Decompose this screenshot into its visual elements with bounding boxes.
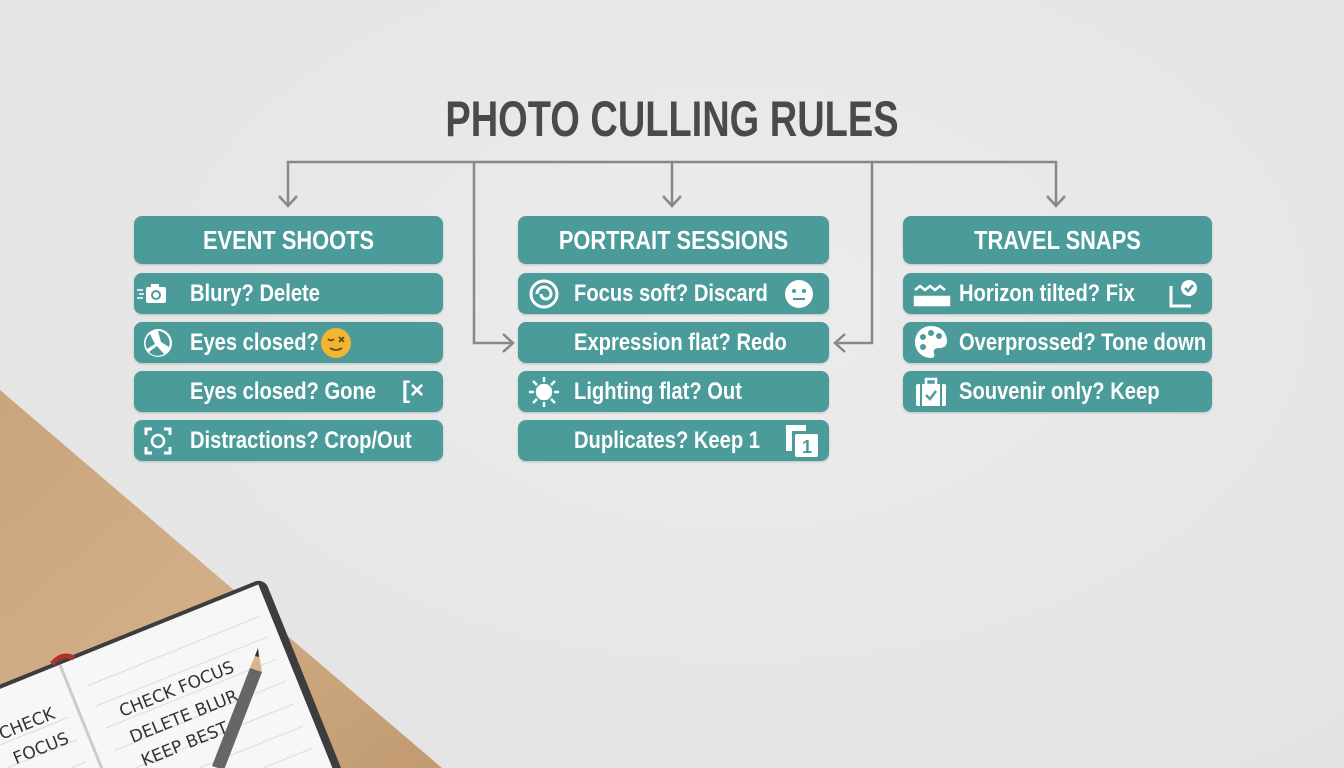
row: souvenir: Souvenir only? Keep: [959, 378, 1160, 405]
row: focus soft: [518, 273, 829, 314]
title: PHOTO CULLING RULES: [445, 91, 899, 147]
row: horizon: [903, 273, 1212, 314]
heading: portrait sessions: [518, 216, 829, 264]
handwritten notes: [0, 635, 257, 768]
panel: event shoots: [133, 216, 444, 463]
row: overprocessed: Overprossed? Tone down: [959, 329, 1206, 356]
pencil: [212, 648, 262, 768]
heading: event shoots: [134, 216, 443, 264]
row: blury: Blury? Delete: [190, 280, 320, 307]
row: duplicates: 1: [802, 437, 812, 457]
row: overprocessed: [903, 322, 1212, 363]
row: duplicates: [518, 420, 829, 461]
row: distractions: Distractions? Crop/Out: [190, 427, 412, 454]
row: focus soft: Focus soft? Discard: [574, 280, 768, 307]
handwritten notes: CHECK FOCUS: [116, 658, 237, 722]
row: eyes closed gone: Eyes closed? Gone: [190, 378, 376, 405]
row: duplicates: Duplicates? Keep 1: [574, 427, 760, 454]
row: expression flat: [518, 322, 829, 363]
handwritten notes: DELETE BLUR: [127, 686, 241, 748]
heading: travel snaps: [903, 216, 1212, 264]
row: eyes closed emoji: [134, 322, 443, 363]
row: eyes closed gone: [×: [402, 377, 424, 404]
row: eyes closed emoji: Eyes closed?: [190, 329, 319, 356]
row: souvenir: [903, 371, 1212, 412]
heading: travel snaps: TRAVEL SNAPS: [974, 225, 1141, 255]
handwritten notes: FOCUS: [10, 729, 72, 768]
row: distractions: [134, 420, 443, 461]
panel: portrait sessions: [517, 216, 830, 463]
panel: travel snaps: [902, 216, 1213, 414]
row: horizon: Horizon tilted? Fix: [959, 280, 1135, 307]
row: eyes closed gone: [134, 371, 443, 412]
row: expression flat: Expression flat? Redo: [574, 329, 787, 356]
heading: event shoots: EVENT SHOOTS: [203, 225, 374, 255]
row: blury: [134, 273, 443, 314]
heading: portrait sessions: PORTRAIT SESSIONS: [559, 225, 788, 255]
row: lighting flat: [518, 371, 829, 412]
row: lighting flat: Lighting flat? Out: [574, 378, 742, 405]
